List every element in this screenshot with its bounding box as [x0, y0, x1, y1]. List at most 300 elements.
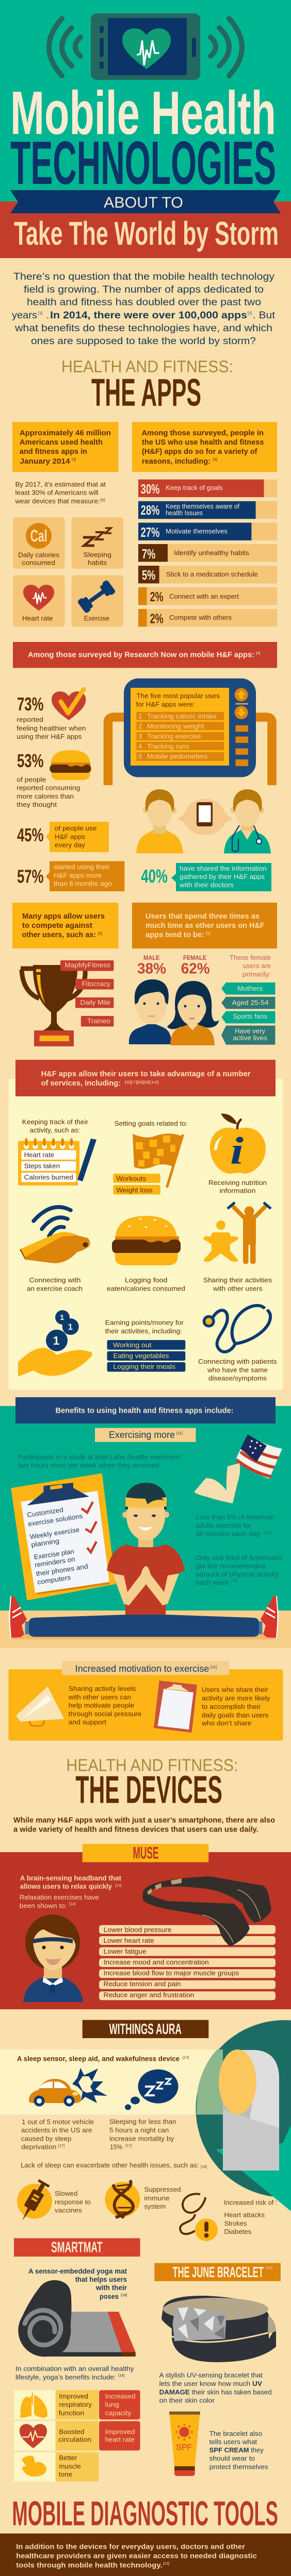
table: yoga benefits: respiratory	[59, 2401, 92, 2408]
panel: three times as much: apps tend to be:	[146, 931, 204, 939]
panel: muse: Relaxation exercises have	[20, 1893, 99, 1901]
bar chart: reasons for use: 2%	[150, 611, 164, 626]
panel: monitor with five popular uses: 2	[138, 722, 142, 730]
bar chart: reasons for use	[138, 480, 277, 626]
table: yoga benefits: Boosted	[59, 2428, 84, 2435]
bar chart: reasons for use: health Issues	[166, 509, 203, 517]
service: earning points: Logging their meals	[113, 1363, 176, 1370]
tags: female user traits	[221, 982, 275, 1045]
service: keeping track: Calories burned	[24, 1174, 73, 1181]
service: sharing activities	[203, 1202, 272, 1293]
table: yoga benefits: muscle	[59, 2462, 81, 2470]
intro text: . But	[253, 310, 276, 321]
panel: increased motivation: with other users can	[68, 1693, 131, 1701]
panel: increased motivation: who don’t share	[201, 1719, 251, 1727]
panel: 46 million americans: January 2014	[20, 457, 70, 466]
background: benefits section	[0, 1406, 291, 1611]
text: american exercise stats: 30 minutes each day	[196, 1530, 260, 1538]
bar chart: reasons for use: Compete with others	[169, 614, 232, 621]
panel: monitor with five popular uses: Tracking caloric intake	[147, 712, 217, 720]
icon: dna: Suppressed	[144, 2185, 181, 2193]
panel: daily calories: consumed	[22, 559, 55, 567]
icon: trophy with app names: MapMyFitness	[65, 961, 111, 969]
panel: monitor with five popular uses: The five most popular uses	[136, 692, 220, 700]
service: logging food: Logging food	[125, 1276, 167, 1284]
text: intel labs study	[18, 1453, 180, 1469]
service: connecting with patients: disease/symptoms	[208, 1374, 267, 1382]
icon: clipboard checklist: exercise solutions	[27, 1512, 84, 1528]
panel: withings aura: 5 hours a night can	[109, 2126, 169, 2134]
panel: reasons for use: (H&F) apps do so for a variety of	[142, 448, 257, 456]
stat: 73%: 73%	[17, 693, 43, 715]
icon: car crash	[29, 2068, 107, 2106]
stat: 45%: H&F apps	[55, 833, 85, 841]
panel: daily calories: Cal	[30, 527, 47, 545]
panel: three times as much: Users that spend three times as	[146, 912, 260, 921]
service: logging food: eaten/calories consumed	[107, 1285, 185, 1293]
text: by 2017: wear devices that measure:	[14, 497, 100, 505]
panel: monitor with five popular uses: Tracking runs	[147, 742, 190, 750]
heading: the apps: HEALTH AND FITNESS:	[61, 358, 233, 376]
tags: female user traits: Mothers	[237, 985, 263, 992]
panel: smartmat: SMARTMAT	[51, 2239, 103, 2256]
service: earning points: 1	[53, 1334, 60, 1347]
panel: sleeping habits: Sleeping	[84, 551, 111, 558]
table: yoga benefits: lung	[105, 2401, 119, 2408]
icon: syringe: Slowed	[55, 2190, 77, 2197]
panel: withings aura: 15%	[110, 2143, 123, 2150]
panel: withings aura: [17]	[183, 2055, 189, 2060]
icon: stethoscope warning: Heart attacks	[224, 2211, 265, 2218]
text: intel labs study: two hours more per week when they received:	[18, 1461, 161, 1469]
panel: daily calories	[13, 517, 65, 569]
panel: reasons for use: Among those surveyed, people in	[141, 429, 264, 437]
icon: sleep thought bubble	[125, 2070, 179, 2110]
service: keeping track	[18, 1118, 96, 1188]
service: setting goals: Workouts	[117, 1175, 147, 1182]
panel: increased motivation: Users who share their	[202, 1686, 268, 1693]
bar chart: reasons for use: Connect with an expert	[169, 592, 239, 600]
stat: 73%	[17, 689, 86, 740]
bar chart: reasons for use: 27%	[141, 524, 159, 540]
panel: smartmat: [16]	[118, 2373, 125, 2378]
icon: yoga mat	[18, 2280, 136, 2357]
text: american exercise stats	[196, 1513, 283, 1586]
stat: 45%: of people use	[55, 824, 96, 832]
service: earning points: 1	[60, 1313, 64, 1322]
service: exercise coach: Connecting with	[29, 1276, 80, 1284]
icon: clipboard	[154, 1681, 197, 1733]
panel: increased motivation: daily goals than users	[202, 1711, 269, 1719]
intro text: health and fitness has doubled over the past two	[27, 297, 261, 308]
panel: three times as much	[132, 903, 277, 948]
stat: 57%: than 6 months ago	[54, 880, 112, 888]
intro text: field is growing. The number of apps dedicated to	[24, 284, 264, 295]
list: relaxation benefits: Reduce tension and pain	[104, 1980, 181, 1988]
service: exercise coach	[20, 1207, 90, 1293]
text: by 2017: least 30% of Americans will	[15, 488, 99, 497]
table: yoga benefits: circulation	[58, 2436, 91, 2444]
icon: clipboard checklist: computers	[37, 1573, 72, 1586]
banner: benefits	[15, 1397, 276, 1423]
panel: 46 million americans: and fitness apps in	[20, 448, 87, 456]
stat: 53%: more calories than	[17, 792, 74, 800]
panel: withings aura: [17]	[125, 2143, 132, 2148]
panel: increased motivation: Sharing activity levels	[69, 1685, 136, 1692]
panel: reasons for use: [3]	[213, 457, 217, 462]
panel: compete: other users, such as:	[22, 931, 96, 939]
panel: muse: A brain-sensing headband that	[20, 1874, 121, 1882]
panel: sleeping habits: habits	[88, 559, 107, 567]
panel: smartmat: with their	[95, 2284, 127, 2292]
icon: trophy with app names: Fitocracy	[82, 980, 111, 988]
icon: stethoscope warning: Diabetes	[224, 2228, 252, 2235]
panel: 46 million americans: [4]	[72, 457, 76, 462]
table: yoga benefits: function	[59, 2409, 84, 2417]
icon: flexed arm with american flag	[194, 1434, 282, 1503]
panel: monitor with five popular uses: Tracking exercise	[147, 732, 201, 740]
heading: the apps: THE APPS	[91, 371, 201, 414]
icon: patient and doctor sharing phone	[136, 789, 271, 853]
panel: june bracelet: lets the user know how much UV	[159, 2380, 262, 2387]
panel: reasons for use: reasons, including:	[142, 457, 211, 466]
panel: june bracelet: DAMAGE their skin has taken based	[159, 2388, 272, 2396]
panel: services: of services, including:	[41, 1079, 121, 1088]
panel: june bracelet: protect themselves	[209, 2463, 268, 2470]
text: american exercise stats: Only one third of Americans	[196, 1554, 283, 1562]
stat: 73%: using their H&F apps	[17, 733, 82, 740]
bar chart: reasons for use: 2%	[150, 589, 164, 604]
stat: male female split: 38%	[137, 960, 166, 977]
text: by 2017: By 2017, it’s estimated that at	[15, 480, 106, 488]
service: nutrition information	[208, 1113, 267, 1194]
banner: diagnostic intro: tools through mobile health technology.	[16, 2561, 163, 2569]
panel: increased motivation: through social pressure	[69, 1710, 141, 1718]
panel: june bracelet: should wear to	[209, 2454, 255, 2462]
service: earning points: Earning points/money for	[105, 1318, 184, 1326]
panel: monitor with five popular uses: 4	[138, 742, 142, 750]
icon: trophy with app names: Traineo	[87, 1017, 110, 1025]
intro text	[12, 272, 276, 347]
service: connecting with patients: Connecting with patients	[198, 1358, 277, 1365]
panel: services: H&F apps allow their users to take advantage of a number	[41, 1070, 251, 1078]
panel: increased motivation: to accomplish their	[202, 1703, 261, 1710]
panel: smartmat: poses	[100, 2293, 119, 2300]
list: relaxation benefits: Increase blood flow to major muscle groups	[104, 1969, 239, 1977]
icon: aura device	[219, 2049, 279, 2171]
panel: increased motivation: Increased motivation to exercise	[75, 1664, 209, 1674]
icon: clipboard checklist: Exercise plan	[34, 1547, 74, 1561]
stat: 57%: 57%	[17, 866, 43, 887]
stat: 45%: 45%	[17, 824, 43, 845]
text: devices intro: a wide variety of health and fitness devices that users can use daily.	[13, 1826, 258, 1834]
service: setting goals: Setting goals related to:	[115, 1120, 188, 1127]
icon: clipboard checklist: reminders on	[34, 1555, 76, 1569]
icon: trophy with app names	[21, 960, 114, 1046]
intro text: what benefits do these technologies have, and which	[14, 323, 272, 334]
panel: increased motivation	[8, 1661, 283, 1740]
panel: increased motivation: [11]	[211, 1665, 217, 1669]
service: nutrition information: Receiving nutrition	[208, 1179, 267, 1187]
panel: muse: [14]	[69, 1902, 76, 1906]
panel: monitor with five popular uses: 3	[138, 732, 142, 740]
bar chart: reasons for use: Identify unhealthy habits	[174, 549, 250, 557]
icon: stethoscope warning: Strokes	[224, 2219, 247, 2227]
panel: smartmat: that helps users	[75, 2276, 127, 2283]
panel: compete: [5]	[98, 931, 102, 936]
bar chart: reasons for use: 5%	[142, 567, 155, 583]
icon: sunscreen tube	[169, 2412, 200, 2476]
text: american exercise stats: Less than 5% of American	[196, 1513, 274, 1521]
intro text: ones are supposed to take the world by storm?	[31, 336, 256, 347]
table: yoga benefits	[14, 2390, 140, 2481]
tab: exercising more	[95, 1428, 196, 1442]
banner: research now: Among those surveyed by Research Now on mobile H&F apps:	[28, 650, 254, 659]
heading: the apps	[61, 358, 233, 414]
intro text: [1]	[248, 311, 252, 315]
panel: june bracelet	[154, 2263, 281, 2476]
panel: exercise: Exercise	[84, 615, 109, 622]
text: american exercise stats: each week	[196, 1579, 230, 1586]
text: intel labs study: Participants in a study at Intel Labs Seattle exercised	[18, 1453, 180, 1461]
service: nutrition information: i	[230, 1130, 244, 1173]
text: american exercise stats: [12]	[231, 1578, 237, 1583]
panel: smartmat: In combination with an overall healthy	[15, 2365, 134, 2372]
stat: male female split: 62%	[181, 960, 210, 977]
service: keeping track: Keeping track of their	[22, 1118, 89, 1126]
service: earning points	[18, 1310, 185, 1377]
banner: research now	[13, 642, 277, 668]
list: relaxation benefits: Lower fatigue	[104, 1947, 147, 1955]
service: keeping track: Steps taken	[24, 1162, 60, 1170]
panel: muse	[0, 1844, 291, 2009]
bar chart: reasons for use: Keep track of goals	[166, 484, 223, 492]
table: yoga benefits: capacity	[105, 2409, 132, 2417]
bar chart: reasons for use: Keep themselves aware of	[166, 502, 239, 510]
service: earning points: 1	[68, 1322, 73, 1332]
icon: trophy with app names: Daily Mile	[80, 998, 110, 1006]
icon: stethoscope warning: Increased risk of :	[224, 2199, 278, 2207]
service: logging food	[107, 1216, 185, 1293]
panel: june bracelet: on their skin color	[159, 2396, 215, 2404]
tags: female user traits: Aged 25-54	[232, 998, 269, 1006]
bar chart: reasons for use: Stick to a medication schedule	[166, 570, 258, 578]
panel: withings aura: caused by sleep	[21, 2135, 71, 2143]
icon: clipboard checklist: their phones and	[36, 1562, 89, 1578]
icon: dna: system	[144, 2202, 166, 2210]
icon: syringe: vaccines	[55, 2206, 82, 2214]
panel: withings aura: 1 out of 5 motor vehicle	[22, 2118, 94, 2126]
intro text: years	[12, 310, 37, 321]
panel: heart rate	[13, 575, 65, 627]
list: relaxation benefits: Lower blood pressure	[104, 1926, 171, 1934]
stat: 45%	[17, 822, 109, 852]
icon: syringe	[17, 2179, 91, 2224]
illustration: person stretching	[9, 1483, 278, 1639]
panel: exercise	[71, 575, 123, 627]
icon: clipboard checklist: Weekly exercise	[29, 1526, 80, 1540]
stat: 40%: 40%	[141, 866, 168, 887]
panel: sleeping habits	[71, 517, 123, 569]
text: american exercise stats: adults exercise for	[196, 1522, 252, 1530]
panel: services	[8, 1060, 283, 1390]
icon: clipboard checklist: Customized	[26, 1506, 64, 1519]
panel: three times as much: [5]	[206, 931, 210, 936]
bar chart: reasons for use: 7%	[142, 546, 155, 562]
text: american exercise stats: [12]	[265, 1530, 271, 1535]
service: keeping track: activity, such as:	[30, 1126, 80, 1134]
table: yoga benefits: Increased	[105, 2392, 136, 2400]
panel: monitor with five popular uses: for H&F apps were:	[136, 700, 195, 708]
service: setting goals: Weight loss	[117, 1186, 153, 1194]
intro text: [1]	[38, 311, 42, 315]
icon: clipboard checklist	[12, 1475, 115, 1599]
panel: june bracelet: SPF CREAM they	[209, 2446, 264, 2454]
stat: 40%: with their doctors	[179, 881, 234, 889]
ribbon: about to	[10, 190, 281, 213]
panel: withings aura: deprivation	[21, 2143, 56, 2150]
stat: 45%: every day	[55, 841, 86, 849]
panel: muse: [13]	[115, 1883, 122, 1888]
service: sharing activities: with other users	[213, 1285, 263, 1293]
text: by 2017: [5]	[101, 498, 105, 502]
panel: reasons for use	[132, 422, 277, 472]
panel: compete	[12, 903, 119, 948]
panel: june bracelet: A stylish UV-sensing bracelet that	[159, 2371, 263, 2379]
service: keeping track: Heart rate	[24, 1151, 54, 1159]
service: earning points: Working out	[113, 1341, 152, 1349]
ribbon: about to: ABOUT TO	[104, 194, 183, 211]
panel: june bracelet: The bracelet also	[209, 2430, 262, 2437]
stat: 53%: reported consuming	[17, 784, 80, 792]
stat: male female split: MALE	[143, 954, 159, 961]
text: american exercise stats: amount of physical activity	[196, 1570, 279, 1578]
stat: 57%: H&F apps more	[54, 872, 102, 879]
intro text: In 2014, there were over 100,000 apps	[50, 310, 247, 321]
tags: female user traits: Have very	[235, 1027, 265, 1035]
panel: withings aura: Lack of sleep can exacerbate other health issues, such as:	[21, 2161, 199, 2169]
banner: benefits: Benefits to using health and fitness apps include:	[56, 1406, 233, 1415]
panel: increased motivation: help motivate people	[69, 1702, 134, 1709]
panel: muse: MUSE	[133, 1844, 159, 1862]
stat: 57%	[17, 861, 124, 891]
stat: 57%: started using their	[54, 863, 110, 871]
tags: female user traits: Sports fans	[233, 1012, 267, 1020]
panel: 46 million americans: Americans used health	[20, 438, 103, 447]
stat: 73%: feeling healthier when	[17, 724, 86, 732]
service: earning points: Eating vegetables	[113, 1352, 169, 1360]
heading: the devices	[66, 1755, 238, 1811]
panel: daily calories: Daily calories	[18, 551, 60, 558]
panel: reasons for use: the US who use health and fitness	[142, 438, 264, 447]
heading: the devices: HEALTH AND FITNESS:	[66, 1755, 238, 1774]
intro text: There’s no question that the mobile health technology	[13, 272, 275, 282]
icon: woman with headband	[23, 1914, 83, 2002]
panel: monitor with five popular uses: 1	[138, 712, 142, 720]
icon: syringe: response to	[55, 2198, 91, 2206]
list: relaxation benefits: Reduce anger and frustration	[104, 1991, 194, 1998]
banner: diagnostic intro: [23]	[163, 2561, 170, 2566]
panel: compete: to compete against	[22, 922, 92, 930]
panel: muse: allows users to relax quickly	[20, 1883, 112, 1890]
icon: clipboard checklist: planning	[30, 1537, 60, 1549]
panel: services: [6][7][8][9][10]	[125, 1080, 159, 1084]
bar chart: reasons for use: 28%	[141, 502, 159, 518]
text: devices intro: While many H&F apps work with just a user’s smartphone, there are also	[13, 1817, 275, 1825]
service: connecting with patients: who have the same	[207, 1366, 268, 1374]
panel: three times as much: much time as other users on H&F	[146, 922, 265, 930]
title	[10, 79, 276, 197]
stat: 40%	[141, 863, 271, 891]
stat: 40%: have shared the information	[180, 865, 266, 872]
panel: monitor with five popular uses	[108, 679, 272, 785]
banner: diagnostic intro: In addition to the devices for everyday users, doctors and other	[16, 2542, 245, 2550]
panel: withings aura: accidents in the US are	[21, 2126, 92, 2134]
panel: compete: Many apps allow users	[22, 912, 105, 921]
panel: withings aura	[0, 2020, 291, 2241]
text: american exercise stats: get the recommended	[196, 1562, 265, 1570]
bar chart: reasons for use: Motivate themselves	[166, 528, 228, 535]
panel: withings aura: A sleep sensor, sleep aid, and wakefulness device	[17, 2055, 180, 2063]
text: by 2017	[14, 480, 106, 505]
icon: man and woman	[129, 979, 219, 1045]
table: yoga benefits: Better	[59, 2454, 77, 2462]
panel: smartmat	[14, 2238, 140, 2481]
stat: male female split	[137, 954, 210, 977]
text: devices intro	[13, 1817, 275, 1834]
icon: muse headband	[143, 1876, 271, 1946]
table: yoga benefits: Improved	[105, 2428, 135, 2435]
table: yoga benefits: Improved	[59, 2392, 88, 2400]
service: nutrition information: information	[220, 1187, 255, 1194]
panel: heart rate: Heart rate	[22, 615, 53, 622]
banner: diagnostic intro: healthcare providers are given easier access to needed diagnostic	[16, 2551, 257, 2560]
panel: withings aura: Sleeping for less than	[109, 2118, 176, 2126]
stat: 73%: reported	[17, 716, 43, 723]
panel: june bracelet: [19]	[266, 2265, 272, 2270]
service: exercise coach: an exercise coach	[27, 1285, 83, 1293]
stat: 53%: they thought	[17, 801, 57, 808]
panel: withings aura: [18]	[201, 2164, 207, 2169]
banner: research now: [4]	[256, 651, 260, 655]
panel: june bracelet: tells users what	[209, 2438, 257, 2446]
text: female users: These female	[230, 954, 271, 961]
tab: exercising more: Exercising more	[109, 1430, 175, 1440]
list: relaxation benefits: Increase mood and concentration	[104, 1958, 209, 1966]
service: setting goals	[113, 1120, 188, 1194]
panel: muse: been shown to:	[20, 1902, 67, 1910]
panel: smartmat: [18]	[121, 2293, 127, 2297]
list: relaxation benefits	[99, 1925, 276, 2000]
panel: 46 million americans	[12, 422, 119, 472]
stat: 53%: 53%	[17, 750, 43, 771]
stat: male female split: FEMALE	[183, 954, 206, 961]
list: relaxation benefits: Lower heart rate	[104, 1937, 154, 1944]
panel: 46 million americans: Approximately 46 million	[20, 429, 111, 437]
stat: 40%: gathered by their H&F apps	[180, 873, 265, 880]
icon: stethoscope warning	[180, 2194, 278, 2241]
text: female users: users are	[243, 962, 271, 970]
table: yoga benefits: heart rate	[105, 2436, 135, 2444]
stat: 53%	[17, 750, 91, 808]
panel: withings aura: increase mortality by	[109, 2135, 174, 2143]
service: connecting with patients	[198, 1306, 277, 1382]
tags: female user traits: active lives	[233, 1034, 268, 1042]
icon: dna: immune	[144, 2194, 170, 2202]
panel: monitor with five popular uses: Mobile pedometers	[147, 752, 208, 760]
panel: smartmat: A sensor-embedded yoga mat	[28, 2267, 127, 2275]
service: earning points: their activities, including:	[105, 1327, 182, 1335]
